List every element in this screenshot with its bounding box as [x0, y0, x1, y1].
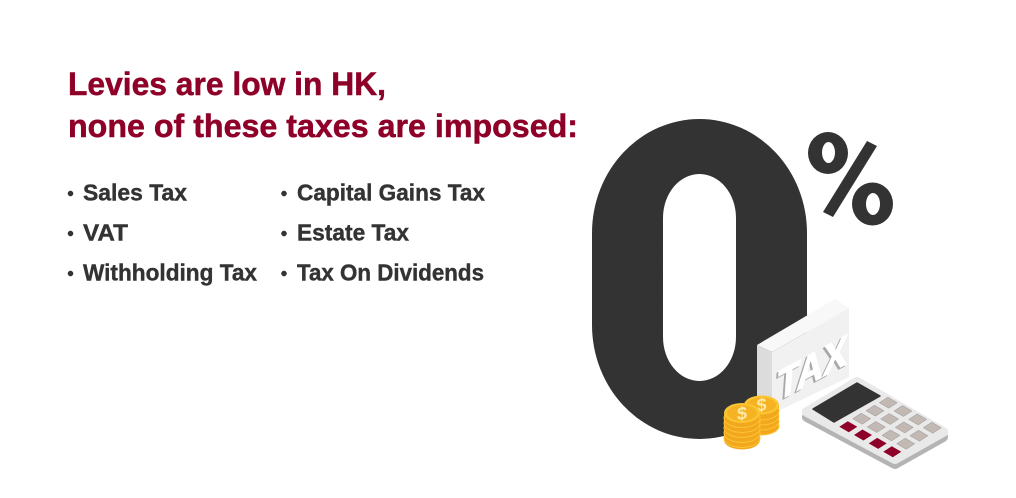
big zero: 0: [588, 63, 811, 498]
calculator keys: [853, 397, 941, 449]
list: right column: Capital Gains Tax: [297, 180, 485, 206]
list: right column: [281, 180, 485, 286]
icon: back coin stack: [744, 394, 779, 435]
list: left column: VAT: [83, 220, 128, 246]
icon: front coin stack: $: [737, 403, 747, 424]
list: left column: Sales Tax: [83, 180, 187, 206]
block label: TAX: [776, 324, 850, 411]
list: left column: Withholding Tax: [83, 260, 257, 286]
list: left column: [68, 180, 257, 286]
icon: tax block: [757, 299, 850, 414]
heading: Levies are low in HK,: [68, 66, 386, 102]
percent sign: %: [813, 131, 885, 231]
icon: back coin stack: $: [756, 394, 767, 416]
icon: front coin stack: [724, 403, 760, 450]
icon: calculator: [807, 382, 943, 464]
calculator screen: [813, 383, 880, 422]
calculator red keys: [839, 421, 901, 457]
block label: TAX: [774, 326, 848, 413]
list: right column: Estate Tax: [297, 220, 409, 246]
heading: none of these taxes are imposed:: [68, 108, 578, 144]
list: right column: Tax On Dividends: [297, 260, 484, 286]
heading: [68, 66, 578, 144]
